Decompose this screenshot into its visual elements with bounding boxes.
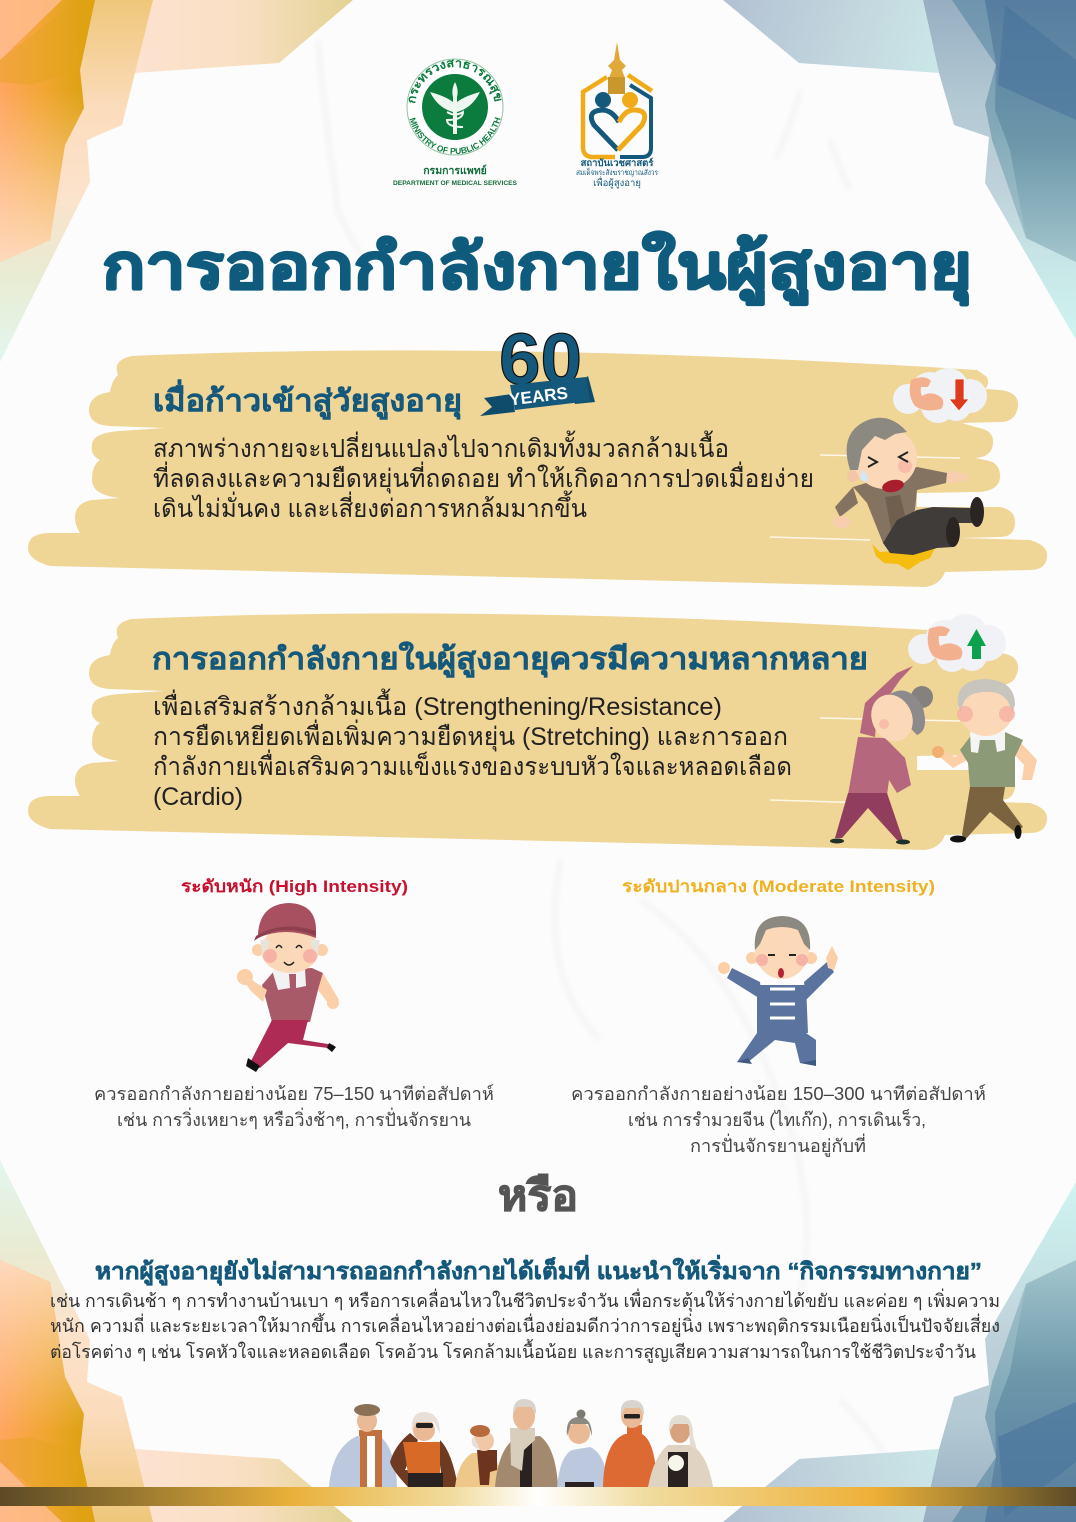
icon: muscle strengthening thought bubble xyxy=(908,614,1006,672)
logo: Department of Medical Services xyxy=(393,58,518,187)
text: physical activity advice: ต่อโรคต่าง ๆ เช่น โรคหัวใจและหลอดเลือด โรคอ้วน โรคกล้ามเนื้อน้อย และการสูญเสียความสามารถในการใช้ชีวิตประจำวัน xyxy=(50,1339,976,1363)
panel: exercise variety xyxy=(28,613,1047,850)
text: physical activity advice: หนัก ความถี่ และระยะเวลาให้มากขึ้น การเคลื่อนไหวอย่างต่อเนื่องย่อมดีกว่าการอยู่นิ่ง เพราะพฤติกรรมเนือยนิ่งเป็นปัจจัยเสี่ยง xyxy=(50,1313,1000,1337)
panel background brush xyxy=(28,613,1047,850)
man walking xyxy=(932,679,1037,842)
text: high intensity recommendation: เช่น การวิ่งเหยาะๆ หรือวิ่งช้าๆ, การปั่นจักรยาน xyxy=(117,1107,471,1130)
senior 2 xyxy=(390,1412,458,1487)
heading: physical activity advice: หากผู้สูงอายุยังไม่สามารถออกกำลังกายได้เต็มที่ แนะนำให้เริ่มจาก “กิจกรรมทางกาย” xyxy=(95,1254,982,1286)
senior 3 xyxy=(455,1425,502,1487)
senior 6 xyxy=(603,1400,657,1487)
text: physical activity advice: เช่น การเดินช้า ๆ การทำงานบ้านเบา ๆ หรือการเคลื่อนไหวในชีวิตประจำวัน เพื่อกระตุ้นให้ร่างกายได้ขยับ และค่อย ๆ เพิ่มความ xyxy=(50,1288,1000,1312)
logo: Institute of Geriatric Medicine xyxy=(576,42,658,189)
body text: exercise variety: (Cardio) xyxy=(153,783,243,811)
logo: Department of Medical Services: DEPARTMENT OF MEDICAL SERVICES xyxy=(393,180,518,187)
senior 5 xyxy=(557,1410,608,1487)
body text: entering old age: เดินไม่มั่นคง และเสี่ยงต่อการหกล้มมากขึ้น xyxy=(153,490,587,523)
body text: entering old age: สภาพร่างกายจะเปลี่ยนแปลงไปจากเดิมทั้งมวลกล้ามเนื้อ xyxy=(153,430,729,463)
woman stretching xyxy=(830,666,933,844)
heading: exercise variety: การออกกำลังกายในผู้สูงอายุควรมีความหลากหลาย xyxy=(152,641,868,678)
heading: or: หรือ xyxy=(498,1172,578,1219)
icon: muscle weakening thought bubble xyxy=(893,368,987,423)
logo: Department of Medical Services: กระทรวงสาธารณสุข xyxy=(408,60,502,104)
body text: exercise variety: กำลังกายเพื่อเสริมความแข็งแรงของระบบหัวใจและหลอดเลือด xyxy=(153,749,792,781)
badge: 60 years: YEARS xyxy=(508,383,569,409)
logo: Department of Medical Services: MINISTRY OF PUBLIC HEALTH xyxy=(410,117,500,154)
panel background brush xyxy=(28,350,1047,587)
badge: 60 years xyxy=(480,320,595,416)
decorative corner shapes top xyxy=(0,0,1076,362)
body text: entering old age: ที่ลดลงและความยืดหยุ่นที่ถดถอย ทำให้เกิดอาการปวดเมื่อยง่าย xyxy=(153,461,814,494)
text: moderate intensity recommendation xyxy=(571,1084,986,1157)
illustration: elderly couple exercising xyxy=(830,666,1037,844)
illustration: tai chi man xyxy=(718,916,838,1066)
heading: entering old age: เมื่อก้าวเข้าสู่วัยสูงอายุ xyxy=(153,379,462,420)
badge: 60 years: 60 xyxy=(499,320,582,400)
illustration: group of seniors xyxy=(329,1399,713,1487)
senior 7 xyxy=(648,1415,713,1487)
text: physical activity advice xyxy=(50,1288,1000,1363)
body text: exercise variety xyxy=(153,688,792,811)
body text: entering old age xyxy=(153,430,814,523)
label: high intensity: ระดับหนัก (High Intensity) xyxy=(181,877,408,896)
text: high intensity recommendation: ควรออกกำลังกายอย่างน้อย 75–150 นาทีต่อสัปดาห์ xyxy=(94,1084,494,1104)
title: การออกกำลังกายในผู้สูงอายุ xyxy=(102,231,972,305)
illustration: elderly man falling xyxy=(833,418,984,570)
logo: Department of Medical Services: กรมการแพทย์ xyxy=(423,164,487,177)
logo: Institute of Geriatric Medicine: เพื่อผู้สูงอายุ xyxy=(593,176,641,189)
text: moderate intensity recommendation: เช่น การรำมวยจีน (ไทเก๊ก), การเดินเร็ว, xyxy=(628,1108,926,1130)
decorative corner shapes bottom xyxy=(0,1160,1076,1522)
logo: Institute of Geriatric Medicine: สมเด็จพระสังฆราชญาณสังวร xyxy=(576,167,658,177)
text: high intensity recommendation xyxy=(94,1084,494,1130)
senior 1 xyxy=(329,1404,397,1487)
body text: exercise variety: การยืดเหยียดเพื่อเพิ่มความยืดหยุ่น (Stretching) และการออก xyxy=(153,719,788,752)
panel: entering old age xyxy=(28,320,1047,587)
label: moderate intensity: ระดับปานกลาง (Moderate Intensity) xyxy=(622,877,935,896)
text: moderate intensity recommendation: การปั่นจักรยานอยู่กับที่ xyxy=(690,1133,866,1157)
senior 4 xyxy=(495,1399,558,1487)
illustration: jogger xyxy=(237,903,339,1072)
text: moderate intensity recommendation: ควรออกกำลังกายอย่างน้อย 150–300 นาทีต่อสัปดาห์ xyxy=(571,1084,986,1104)
bottom gold bar xyxy=(0,1487,1076,1506)
body text: exercise variety: เพื่อเสริมสร้างกล้ามเนื้อ (Strengthening/Resistance) xyxy=(153,688,722,721)
logo: Institute of Geriatric Medicine: สถาบันเวชศาสตร์ xyxy=(581,157,654,169)
